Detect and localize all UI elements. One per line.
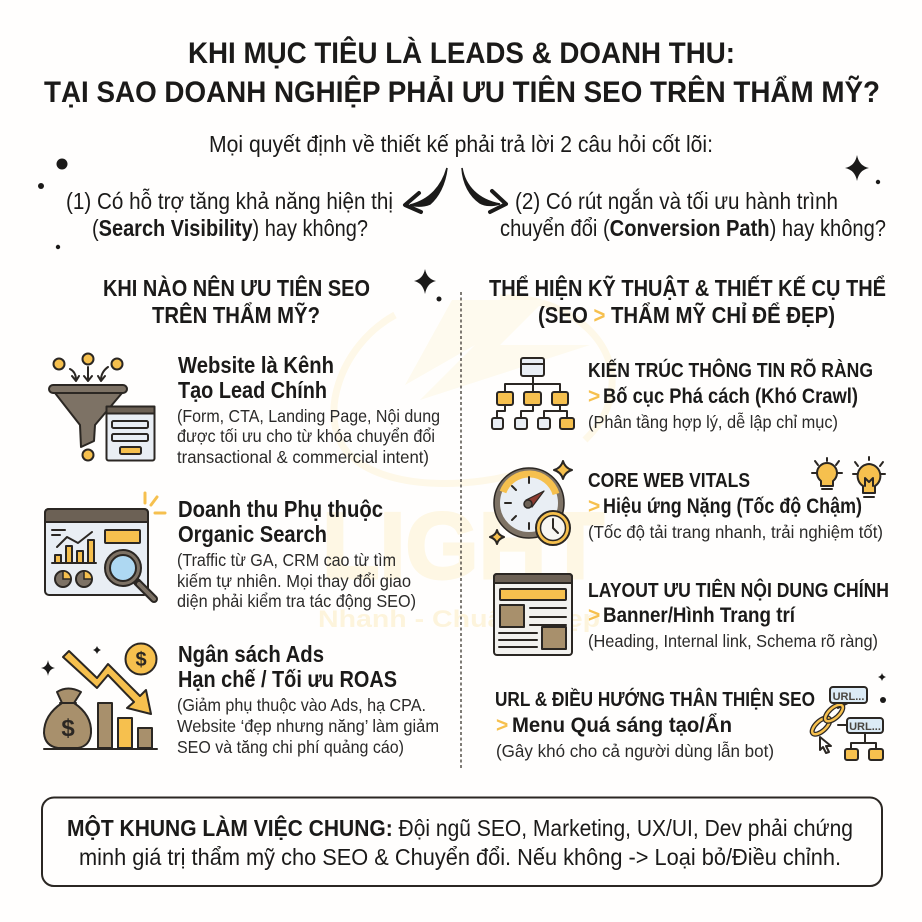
question 2 bbox=[500, 188, 886, 241]
question 1: (Search Visibility) hay không? bbox=[92, 215, 368, 241]
decorative sparkles and dots bbox=[38, 155, 880, 302]
description: website lead channel: transactional & commercial intent) bbox=[177, 447, 429, 467]
icon: funnel with form bbox=[49, 354, 154, 460]
icon: money bag with falling chart bbox=[41, 644, 157, 749]
heading: website lead channel: Website là Kênh bbox=[178, 352, 334, 378]
heading: limited ads budget: Ngân sách Ads bbox=[178, 641, 324, 667]
heading: content-first layout bbox=[588, 578, 889, 627]
icon: gauge and clock bbox=[490, 461, 572, 545]
description: website lead channel: (Form, CTA, Landing Page, Nội dung bbox=[177, 406, 440, 426]
description: revenue from organic search: diện phải kiểm tra tác động SEO) bbox=[177, 591, 416, 611]
callout: shared working framework: minh giá trị thẩm mỹ cho SEO & Chuyển đổi. Nếu không -> Loại bỏ/Điều chỉnh. bbox=[79, 844, 841, 870]
icon: site tree bbox=[492, 358, 574, 429]
heading: information architecture: KIẾN TRÚC THÔNG TIN RÕ RÀNG bbox=[588, 358, 873, 382]
heading: core web vitals: CORE WEB VITALS bbox=[588, 469, 750, 492]
right column heading bbox=[489, 274, 886, 328]
heading: content-first layout: > bbox=[588, 604, 600, 627]
title bbox=[44, 36, 880, 109]
heading: content-first layout: Banner/Hình Trang trí bbox=[603, 604, 796, 627]
watermark: LIGHT logo bbox=[318, 298, 612, 633]
callout: shared working framework: MỘT KHUNG LÀM VIỆC CHUNG: Đội ngũ SEO, Marketing, UX/UI, Dev phải chứng bbox=[67, 814, 853, 841]
description: core web vitals: (Tốc độ tải trang nhanh, trải nghiệm tốt) bbox=[588, 522, 883, 542]
description: limited ads budget: SEO và tăng chi phí quảng cáo) bbox=[177, 737, 404, 757]
description: website lead channel: được tối ưu cho từ khóa chuyển đổi bbox=[177, 426, 435, 446]
heading: revenue from organic search: Organic Search bbox=[178, 521, 327, 547]
icon: light bulbs bbox=[812, 457, 885, 497]
panel: content-first layout bbox=[494, 574, 889, 655]
panel: website lead channel bbox=[49, 352, 440, 467]
heading: website lead channel: Tạo Lead Chính bbox=[178, 377, 327, 403]
heading: SEO-friendly URLs: Menu Quá sáng tạo/Ẩn bbox=[512, 714, 732, 737]
heading: revenue from organic search bbox=[178, 496, 383, 547]
icon: URL chain and cursor: URL... bbox=[849, 721, 881, 733]
heading: core web vitals bbox=[588, 469, 862, 518]
heading: SEO-friendly URLs: > bbox=[496, 714, 508, 737]
icon: URL chain and cursor bbox=[809, 673, 886, 760]
description: limited ads budget: Website ‘đẹp nhưng năng’ làm giảm bbox=[177, 716, 439, 736]
panel: information architecture bbox=[492, 358, 873, 432]
arrow: to question 1 bbox=[405, 168, 447, 212]
left column heading: KHI NÀO NÊN ƯU TIÊN SEO bbox=[103, 274, 370, 301]
description: limited ads budget bbox=[177, 695, 439, 757]
description: revenue from organic search bbox=[177, 550, 416, 611]
icon: URL chain and cursor: URL... bbox=[833, 691, 864, 703]
question 1: (1) Có hỗ trợ tăng khả năng hiện thị bbox=[66, 188, 393, 214]
right column heading: (SEO > THẨM MỸ CHỈ ĐỂ ĐẸP) bbox=[538, 300, 835, 328]
left column heading bbox=[103, 274, 370, 328]
icon: money bag with falling chart: $ bbox=[135, 649, 147, 671]
watermark: LIGHT logo: Nhanh - Chuẩn - Đẹp bbox=[318, 606, 600, 633]
icon: page layout window bbox=[494, 574, 572, 655]
description: revenue from organic search: kiếm tự nhiên. Mọi thay đổi giao bbox=[177, 571, 411, 591]
heading: SEO-friendly URLs bbox=[495, 687, 815, 737]
description: content-first layout: (Heading, Internal link, Schema rõ ràng) bbox=[588, 631, 878, 651]
panel: core web vitals bbox=[490, 457, 885, 545]
title: TẠI SAO DOANH NGHIỆP PHẢI ƯU TIÊN SEO TRÊN THẨM MỸ? bbox=[44, 75, 880, 109]
subtitle: Mọi quyết định về thiết kế phải trả lời 2 câu hỏi cốt lõi: bbox=[209, 131, 713, 157]
icon: analytics dashboard with magnifier bbox=[45, 493, 165, 599]
heading: SEO-friendly URLs: URL & ĐIỀU HƯỚNG THÂN THIỆN SEO bbox=[495, 687, 815, 711]
description: website lead channel bbox=[177, 406, 440, 467]
heading: revenue from organic search: Doanh thu Phụ thuộc bbox=[178, 496, 383, 522]
heading: core web vitals: Hiệu ứng Nặng (Tốc độ Chậm) bbox=[603, 495, 862, 518]
description: information architecture: (Phân tầng hợp lý, dễ lập chỉ mục) bbox=[588, 411, 838, 432]
question 1 bbox=[66, 188, 393, 241]
heading: limited ads budget: Hạn chế / Tối ưu ROAS bbox=[178, 666, 397, 692]
heading: limited ads budget bbox=[178, 641, 397, 692]
description: SEO-friendly URLs: (Gây khó cho cả người dùng lẫn bot) bbox=[496, 740, 774, 761]
callout: shared working framework bbox=[42, 798, 882, 886]
icon: money bag with falling chart: $ bbox=[61, 715, 75, 742]
panel: SEO-friendly URLs and navigation bbox=[495, 673, 886, 761]
question 2: chuyển đổi (Conversion Path) hay không? bbox=[500, 215, 886, 241]
description: revenue from organic search: (Traffic từ GA, CRM cao từ tìm bbox=[177, 550, 396, 570]
heading: information architecture: Bố cục Phá cách (Khó Crawl) bbox=[603, 385, 858, 408]
panel: revenue from organic search bbox=[45, 493, 416, 611]
left column heading: TRÊN THẨM MỸ? bbox=[152, 301, 320, 328]
question 2: (2) Có rút ngắn và tối ưu hành trình bbox=[515, 188, 838, 214]
heading: website lead channel bbox=[178, 352, 334, 403]
watermark: LIGHT logo: LIGHT bbox=[322, 493, 604, 598]
heading: core web vitals: > bbox=[588, 495, 600, 518]
title: KHI MỤC TIÊU LÀ LEADS & DOANH THU: bbox=[188, 36, 735, 70]
heading: information architecture: > bbox=[588, 385, 600, 408]
arrow: to question 2 bbox=[462, 168, 506, 212]
panel: limited ads budget bbox=[41, 641, 439, 757]
description: limited ads budget: (Giảm phụ thuộc vào Ads, hạ CPA. bbox=[177, 695, 426, 715]
heading: information architecture bbox=[588, 358, 873, 408]
